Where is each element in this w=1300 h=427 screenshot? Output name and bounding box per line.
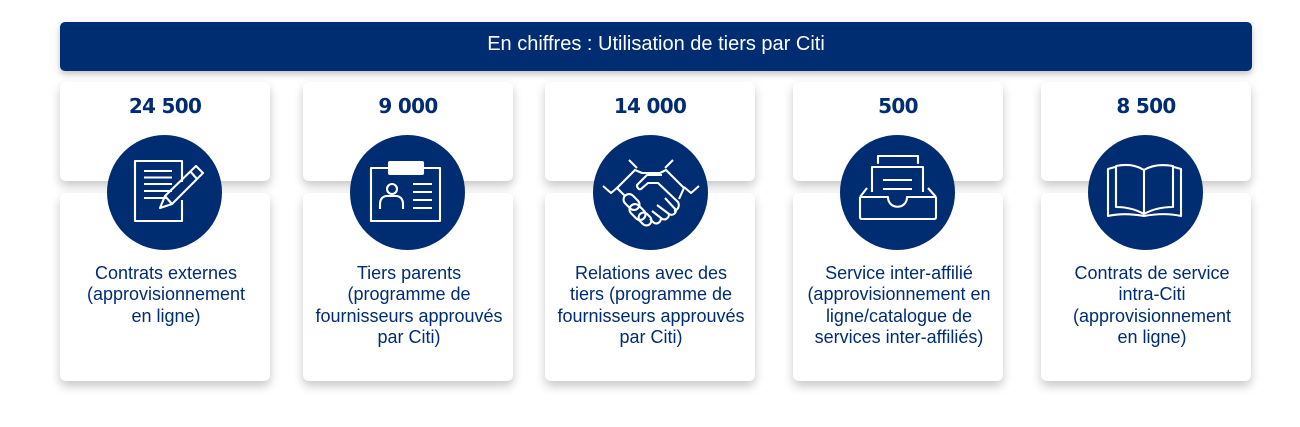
label: (approvisionnement xyxy=(87,284,245,304)
lower card xyxy=(545,193,755,381)
panel: third-party relationships xyxy=(540,86,760,391)
label: en ligne) xyxy=(131,306,201,326)
label: Tiers parents xyxy=(357,263,461,283)
number: 14 000: 14 000 xyxy=(614,94,686,118)
label: fournisseurs approuvés xyxy=(315,306,503,326)
label xyxy=(315,263,503,347)
label: ligne/catalogue de xyxy=(826,306,972,326)
number: 500: 500 xyxy=(878,94,918,118)
label: Contrats de service xyxy=(1074,263,1230,283)
label xyxy=(87,263,245,326)
icon: document tray xyxy=(840,135,955,250)
lower card xyxy=(793,193,1003,381)
label: par Citi) xyxy=(619,327,682,347)
label xyxy=(807,263,991,347)
lower card xyxy=(60,193,270,381)
label: (approvisionnement en xyxy=(807,284,991,304)
lower card xyxy=(303,193,513,381)
label xyxy=(557,263,745,347)
upper card xyxy=(303,82,513,181)
label: intra-Citi xyxy=(1118,284,1186,304)
label: Relations avec des xyxy=(575,263,727,283)
label: fournisseurs approuvés xyxy=(557,306,745,326)
label: par Citi) xyxy=(377,327,440,347)
upper card xyxy=(545,82,755,181)
label xyxy=(1073,263,1231,347)
icon: handshake xyxy=(593,135,708,250)
panel: external contracts xyxy=(55,86,275,391)
lower card xyxy=(1041,193,1251,381)
upper card xyxy=(793,82,1003,181)
label: Service inter-affilié xyxy=(825,263,973,283)
label: services inter-affiliés) xyxy=(815,327,983,347)
number: 24 500: 24 500 xyxy=(129,94,201,118)
title banner: En chiffres : Utilisation de tiers par Citi xyxy=(487,33,825,55)
icon: ID badge xyxy=(350,135,465,250)
panel: inter-affiliate service xyxy=(788,86,1008,391)
panel: intra-Citi service contracts xyxy=(1036,86,1256,391)
upper card xyxy=(60,82,270,181)
number: 8 500: 8 500 xyxy=(1116,94,1176,118)
label: (approvisionnement xyxy=(1073,306,1231,326)
title banner xyxy=(60,22,1252,71)
upper card xyxy=(1041,82,1251,181)
label: tiers (programme de xyxy=(570,284,732,304)
icon: document and pencil xyxy=(107,135,222,250)
number: 9 000: 9 000 xyxy=(378,94,438,118)
label: (programme de xyxy=(347,284,471,304)
label: Contrats externes xyxy=(95,263,237,283)
label: en ligne) xyxy=(1117,327,1187,347)
panel: parent third parties xyxy=(298,86,518,391)
icon: open book xyxy=(1088,135,1203,250)
